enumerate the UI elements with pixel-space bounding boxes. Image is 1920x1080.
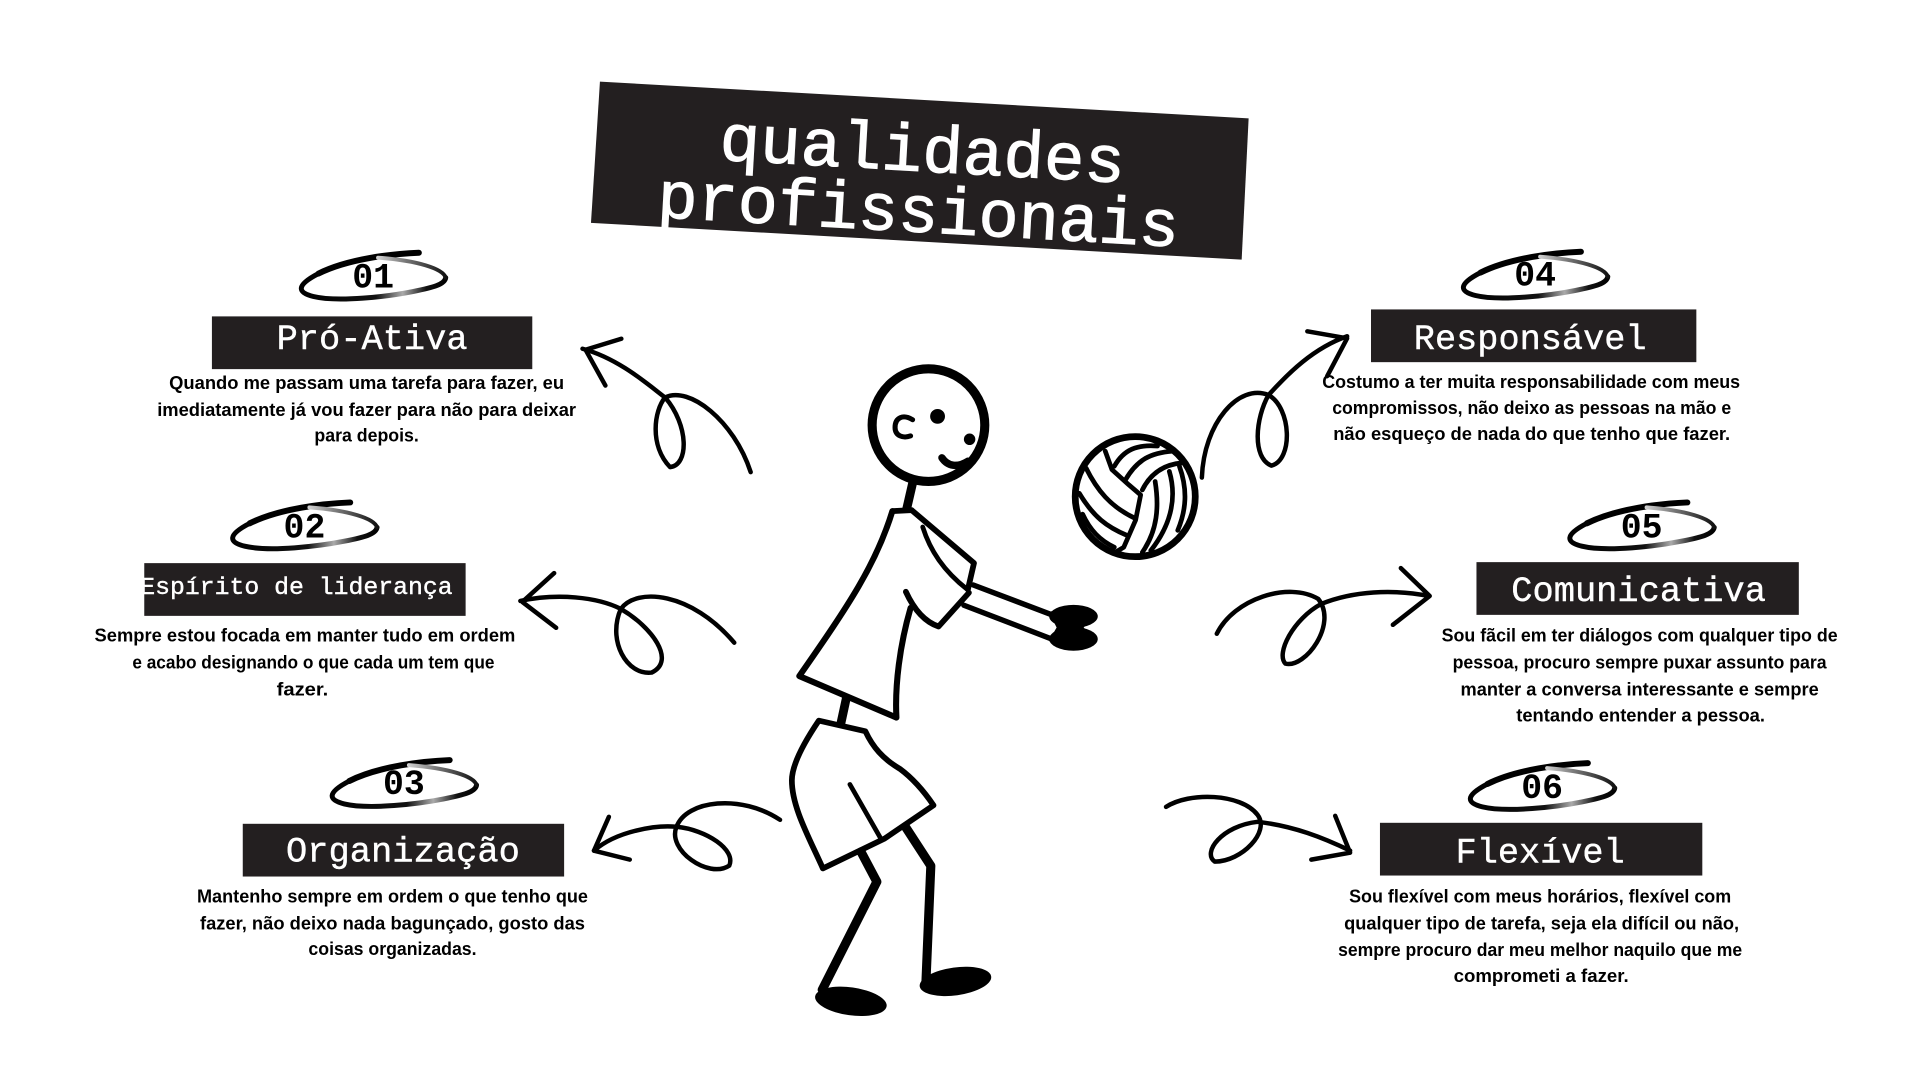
text block 05: [1442, 625, 1838, 725]
number badge 04: [1463, 252, 1608, 298]
text block 02: e acabo designando o que cada um tem que: [132, 652, 494, 673]
arrow 06: [1166, 797, 1350, 862]
arrow 05: [1217, 568, 1430, 664]
heading bar Responsável: [1371, 309, 1696, 362]
heading bar Pró-Ativa: Pró-Ativa: [277, 320, 468, 360]
heading bar Responsável: Responsável: [1414, 320, 1647, 360]
text block 05: pessoa, procuro sempre puxar assunto para: [1453, 652, 1827, 673]
arrow 03: [594, 803, 780, 869]
shorts and legs: [792, 697, 993, 1020]
panel: 01 Pró-Ativa: [157, 253, 576, 446]
heading bar Pró-Ativa: [212, 316, 532, 369]
arrow 02: [520, 573, 734, 673]
arms and hands: [964, 585, 1098, 651]
text block 06: [1338, 885, 1742, 986]
text block 05: manter a conversa interessante e sempre: [1461, 678, 1819, 699]
arrow 04: [1202, 331, 1347, 478]
text block 01: Quando me passam uma tarefa para fazer, eu: [169, 372, 564, 393]
text block 06: sempre procuro dar meu melhor naquilo que me: [1338, 939, 1742, 960]
text block 02: Sempre estou focada em manter tudo em ordem: [95, 625, 515, 646]
head: [872, 369, 985, 481]
text block 01: imediatamente já vou fazer para não para deixar: [157, 399, 576, 420]
illustration: volleyball: [1075, 437, 1195, 557]
heading bar Espírito de liderança: Espírito de liderança: [140, 575, 453, 602]
panel: 05 Comunicativa: [1442, 502, 1838, 725]
panel: 04 Responsável: [1322, 252, 1740, 444]
title: profissionais: [655, 163, 1181, 268]
text block 02: [95, 625, 515, 699]
heading bar Organização: [243, 824, 564, 877]
number badge 05: 05: [1621, 509, 1663, 548]
number badge 02: [233, 502, 377, 549]
text block 04: [1322, 371, 1740, 444]
number badge 03: 03: [383, 766, 425, 805]
heading bar Organização: Organização: [286, 833, 520, 873]
panel: 06 Flexível: [1338, 763, 1742, 986]
number badge 03: [332, 760, 477, 806]
text block 06: Sou flexível com meus horários, flexível com: [1349, 885, 1731, 906]
illustration: stick figure player: [792, 369, 1098, 1020]
text block 03: coisas organizadas.: [308, 938, 477, 959]
text block 04: compromissos, não deixo as pessoas na mão e: [1332, 397, 1731, 418]
title: [591, 82, 1249, 268]
text block 02: fazer.: [277, 678, 328, 699]
number badge 06: 06: [1521, 770, 1563, 809]
number badge 05: [1570, 502, 1714, 549]
number badge 01: 01: [352, 260, 394, 299]
number badge 01: [301, 253, 446, 299]
text block 03: [197, 885, 588, 959]
text block 04: Costumo a ter muita responsabilidade com meus: [1322, 371, 1740, 392]
heading bar Comunicativa: Comunicativa: [1511, 572, 1766, 612]
title: qualidades: [717, 106, 1127, 204]
text block 04: não esqueço de nada do que tenho que fazer.: [1333, 423, 1730, 444]
torso and shirt: [799, 483, 974, 718]
panel: 03 Organização: [197, 760, 588, 959]
heading bar Flexível: [1380, 823, 1702, 876]
panel: 02 Espírito de liderança: [95, 502, 515, 699]
number badge 04: 04: [1514, 258, 1556, 297]
text block 03: Mantenho sempre em ordem o que tenho que: [197, 885, 588, 906]
heading bar Flexível: Flexível: [1456, 834, 1625, 874]
text block 06: qualquer tipo de tarefa, seja ela difícil ou não,: [1344, 912, 1739, 933]
number badge 02: 02: [284, 509, 325, 548]
text block 01: [157, 372, 576, 446]
text block 03: fazer, não deixo nada bagunçado, gosto das: [200, 912, 585, 933]
text block 06: comprometi a fazer.: [1454, 965, 1629, 986]
heading bar Comunicativa: [1476, 562, 1799, 615]
text block 05: tentando entender a pessoa.: [1516, 704, 1765, 725]
number badge 06: [1470, 763, 1615, 809]
heading bar Espírito de liderança: [140, 563, 466, 616]
text block 01: para depois.: [314, 425, 419, 446]
text block 05: Sou fãcil em ter diálogos com qualquer tipo de: [1442, 625, 1838, 646]
arrow 01: [583, 339, 751, 472]
